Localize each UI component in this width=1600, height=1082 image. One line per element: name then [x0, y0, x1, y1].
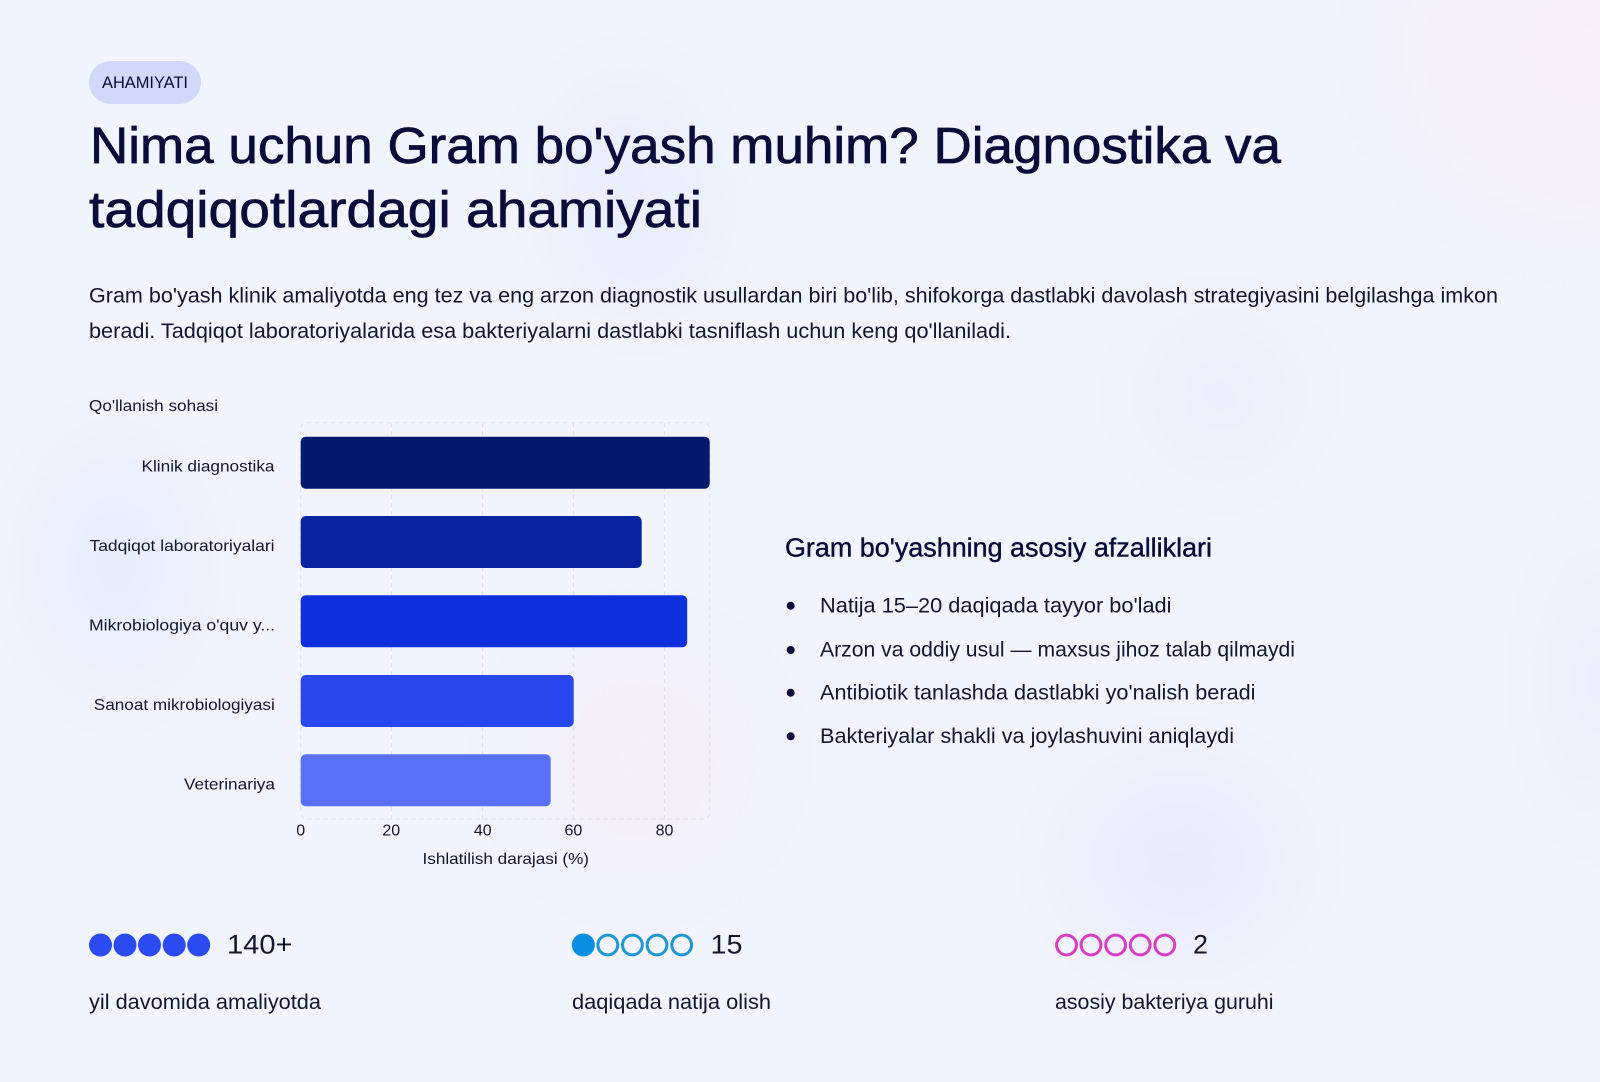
x axis ticks — [296, 822, 674, 840]
bar chart: application areas — [89, 398, 710, 868]
list item 4: Bakteriyalar shakli va joylashuvini aniqlaydi — [820, 724, 1234, 748]
bar: Tadqiqot laboratoriyalari 75 — [90, 516, 642, 568]
title: Nima uchun Gram bo'yash muhim? Diagnostika va — [90, 117, 1282, 174]
y axis title: Qo'llanish sohasi — [89, 398, 218, 415]
intro paragraph: beradi. Tadqiqot laboratoriyalarida esa bakteriyalarni dastlabki tasniflash uchun keng qo'llaniladi. — [89, 319, 1011, 343]
list item 1: Natija 15–20 daqiqada tayyor bo'ladi — [820, 594, 1172, 618]
tag badge: AHAMIYATI — [102, 73, 188, 92]
list item 2: Arzon va oddiy usul — maxsus jihoz talab qilmaydi — [820, 638, 1295, 662]
stat: 15 minutes — [572, 930, 771, 1014]
stat: 140+ years: 140+ — [227, 930, 292, 960]
icon: five outlined dots — [1057, 935, 1175, 955]
x axis ticks: 80 — [656, 822, 674, 840]
x axis ticks: 60 — [565, 822, 582, 840]
bar: Klinik diagnostika 90 — [142, 437, 710, 489]
stat: 140+ years — [89, 930, 321, 1014]
tag badge — [89, 61, 201, 104]
bar: Sanoat mikrobiologiyasi 60: Sanoat mikrobiologiyasi — [94, 697, 275, 714]
icon: one of five dots filled — [572, 934, 692, 956]
panel: advantages — [785, 534, 1295, 748]
stat: 140+ years: yil davomida amaliyotda — [89, 990, 321, 1014]
bar: Mikrobiologiya o'quv y... 85 — [89, 595, 687, 647]
x axis ticks: 20 — [382, 822, 400, 840]
advantages heading: Gram bo'yashning asosiy afzalliklari — [785, 534, 1212, 562]
bar: Sanoat mikrobiologiyasi 60 — [94, 675, 574, 727]
intro paragraph — [89, 284, 1498, 343]
title — [89, 117, 1282, 238]
bar: Veterinariya 55: Veterinariya — [184, 776, 275, 794]
intro paragraph: Gram bo'yash klinik amaliyotda eng tez va eng arzon diagnostik usullardan biri bo'lib, shifokorga dastlabki davolash strategiyasini belgilashga imkon — [89, 284, 1498, 308]
list item 3: Antibiotik tanlashda dastlabki yo'nalish beradi — [820, 680, 1256, 704]
stat: 15 minutes: daqiqada natija olish — [572, 990, 771, 1014]
title: tadqiqotlardagi ahamiyati — [89, 181, 702, 238]
stat: 15 minutes: 15 — [710, 930, 742, 960]
bar: Mikrobiologiya o'quv y... 85: Mikrobiologiya o'quv y... — [89, 618, 275, 634]
stat: 2 bacteria groups — [1055, 930, 1274, 1014]
stat: 2 bacteria groups: 2 — [1193, 930, 1208, 960]
bar: Klinik diagnostika 90: Klinik diagnostika — [142, 459, 275, 476]
x axis ticks: 0 — [296, 822, 305, 840]
bar: Veterinariya 55 — [184, 754, 551, 806]
stat: 2 bacteria groups: asosiy bakteriya guruhi — [1055, 990, 1274, 1014]
bar: Tadqiqot laboratoriyalari 75: Tadqiqot laboratoriyalari — [90, 538, 274, 555]
x axis title: Ishlatilish darajasi (%) — [422, 851, 589, 868]
x axis ticks: 40 — [474, 822, 492, 840]
icon: five filled dots — [89, 934, 210, 956]
